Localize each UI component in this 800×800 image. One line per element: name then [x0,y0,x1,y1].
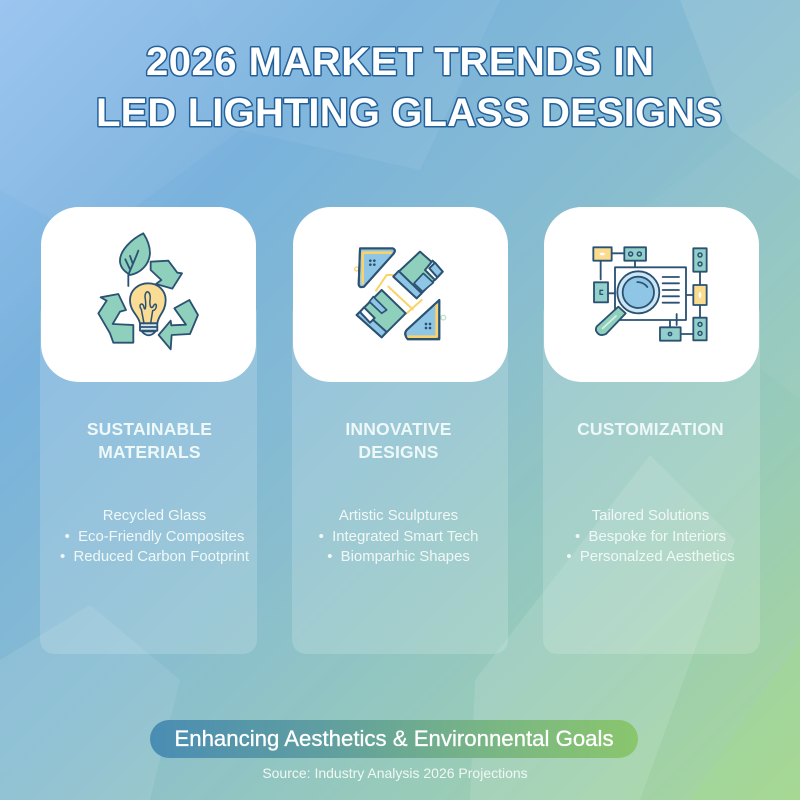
icon card: glass panels [293,207,508,382]
heading: MATERIALS [98,442,201,462]
bullet list: • Eco-Friendly Composites [65,529,244,545]
heading [345,419,452,462]
tagline banner: Enhancing Aesthetics & Environnental Goals [174,726,614,751]
heading [87,419,212,462]
tagline banner [150,720,638,758]
bullet list [319,508,478,565]
source note: Source: Industry Analysis 2026 Projections [262,765,528,781]
heading: CUSTOMIZATION [577,419,724,439]
panel: sustainable materials [40,207,257,654]
bullet list: Recycled Glass [103,508,206,524]
panel: customization [543,207,760,654]
bullet list [60,508,249,565]
bullet list: • Personalzed Aesthetics [566,549,735,565]
icon card: recycling bulb [41,207,256,382]
bullet list [566,508,735,565]
bullet list: Tailored Solutions [592,508,709,524]
panel: innovative designs [292,207,508,654]
heading: DESIGNS [358,442,439,462]
heading: INNOVATIVE [345,419,452,439]
title: 2026 MARKET TRENDS IN [146,40,654,84]
bullet list: • Integrated Smart Tech [319,529,478,545]
title [96,40,722,135]
bullet list: • Biomparhic Shapes [327,549,470,565]
title: LED LIGHTING GLASS DESIGNS [96,91,722,135]
bullet list: • Reduced Carbon Footprint [60,549,249,565]
bullet list: Artistic Sculptures [339,508,458,524]
icon card: magnifier and flow [544,207,759,382]
heading: SUSTAINABLE [87,419,212,439]
bullet list: • Bespoke for Interiors [575,529,726,545]
